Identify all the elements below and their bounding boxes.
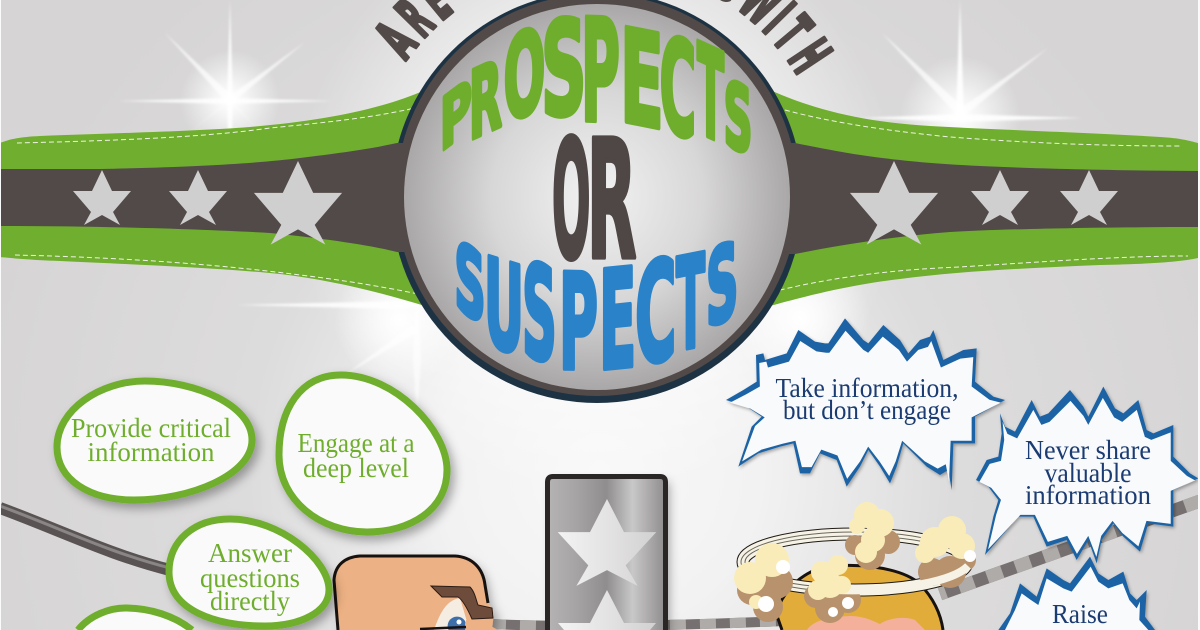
burst: Take information, but don't engage: but don’t engage bbox=[783, 395, 951, 425]
heading: SUSPECTS: E bbox=[599, 241, 636, 402]
heading: PROSPECTS: C bbox=[660, 9, 696, 171]
iris bbox=[448, 617, 466, 630]
sparkle: upper right bbox=[860, 0, 1082, 176]
bubble: Engage at a deep level bbox=[279, 375, 447, 532]
rope: upper left bbox=[0, 506, 170, 570]
sparkle: lower right of medallion bbox=[730, 248, 870, 388]
heading: PROSPECTS: T bbox=[697, 16, 724, 173]
bubble: Engage at a deep level: deep level bbox=[303, 453, 409, 483]
rope: right upper bbox=[940, 501, 1200, 594]
belt: green strap left bbox=[0, 90, 428, 306]
character: prospect head bbox=[334, 556, 498, 630]
bubble: Answer questions directly bbox=[169, 519, 329, 626]
eye white bbox=[434, 598, 468, 630]
mouth shadow bbox=[420, 627, 466, 629]
star left 2 bbox=[169, 170, 227, 225]
hair outline bbox=[776, 565, 943, 630]
burst: Never share valuable information: information bbox=[1025, 480, 1151, 510]
star right 2 bbox=[971, 170, 1029, 225]
rope: lower centre bbox=[490, 621, 785, 626]
burst: Never share valuable information: valuable bbox=[1044, 458, 1132, 488]
arched title: T bbox=[760, 4, 824, 62]
character: suspect head with dizzy halo bbox=[734, 502, 976, 630]
post star 2 bbox=[558, 590, 656, 630]
heading: OR bbox=[552, 107, 637, 297]
eyebrow bbox=[431, 586, 493, 619]
heading: SUSPECTS: S bbox=[522, 236, 557, 394]
burst: Take information, but don't engage bbox=[726, 318, 1005, 490]
star right 3 bbox=[1060, 170, 1118, 225]
popcorn front bbox=[804, 555, 968, 623]
bubble: Provide critical information: Provide critical bbox=[71, 413, 231, 443]
heading: PROSPECTS: P bbox=[440, 62, 472, 169]
arched title bbox=[363, 0, 844, 84]
sparkle: upper left bbox=[118, 0, 332, 200]
heading: PROSPECTS: S bbox=[724, 62, 752, 176]
star right 1 bbox=[850, 161, 938, 245]
star left 1 bbox=[73, 170, 131, 225]
head outline bbox=[334, 556, 488, 630]
arched title: H bbox=[775, 28, 844, 84]
post outline bbox=[548, 476, 666, 630]
halo ring bbox=[741, 532, 969, 592]
bubble: Provide critical information bbox=[57, 381, 252, 500]
bubble: Provide critical information: information bbox=[88, 437, 215, 467]
stitching right bbox=[772, 110, 1188, 292]
pupil highlight bbox=[456, 620, 462, 624]
burst shape bbox=[976, 387, 1198, 563]
burst: Raise: Raise bbox=[1052, 599, 1108, 629]
medallion ring bbox=[391, 0, 803, 403]
belt: green strap right bbox=[770, 90, 1198, 306]
popcorn left bbox=[734, 543, 793, 622]
heading: SUSPECTS: C bbox=[635, 228, 676, 399]
nose bbox=[466, 620, 498, 630]
head fill bbox=[334, 556, 494, 630]
heading: PROSPECTS bbox=[440, 0, 752, 176]
heading: SUSPECTS bbox=[454, 219, 738, 402]
bubble: Answer questions directly: questions bbox=[200, 563, 300, 593]
medallion disc bbox=[404, 4, 790, 390]
hair fill bbox=[776, 565, 943, 630]
star left 3 bbox=[254, 161, 342, 245]
heading: OR: R bbox=[587, 107, 637, 296]
post star 1 bbox=[558, 499, 656, 586]
burst: Never share valuable information: Never share bbox=[1025, 435, 1151, 465]
belt: dark strap left bbox=[0, 143, 420, 252]
heading: PROSPECTS: E bbox=[620, 1, 664, 160]
bubble: Answer questions directly: Answer bbox=[208, 538, 292, 568]
burst shape bbox=[998, 557, 1155, 630]
face bbox=[807, 616, 925, 630]
heading: PROSPECTS: R bbox=[469, 39, 502, 163]
burst shape bbox=[726, 318, 1005, 490]
bubble: Engage at a deep level: Engage at a bbox=[298, 428, 415, 458]
heading: SUSPECTS: S bbox=[706, 219, 738, 354]
heading: SUSPECTS: S bbox=[454, 219, 486, 347]
burst: Take information, but don't engage: Take information, bbox=[776, 373, 958, 403]
stitching left bbox=[15, 108, 428, 296]
popcorn back bbox=[845, 502, 900, 570]
arched title: A bbox=[363, 10, 430, 70]
heading: OR: O bbox=[552, 107, 591, 297]
heading: PROSPECTS: O bbox=[504, 2, 545, 149]
post body bbox=[548, 476, 666, 630]
burst: Never share valuable information bbox=[976, 387, 1198, 563]
belt: dark strap right bbox=[775, 143, 1198, 254]
ring post with stars bbox=[548, 476, 666, 630]
bubble: Answer questions directly: directly bbox=[210, 586, 290, 616]
sparkle: lower left of medallion bbox=[236, 255, 465, 420]
burst: Raise bbox=[998, 557, 1155, 630]
bubble: partial bottom left bbox=[78, 608, 192, 630]
heading: SUSPECTS: P bbox=[559, 246, 598, 400]
heading: SUSPECTS: T bbox=[676, 228, 705, 381]
heading: SUSPECTS: U bbox=[484, 231, 524, 384]
soft light behind medallion bbox=[297, 0, 897, 497]
belt stars: left bbox=[73, 161, 342, 245]
popcorn right bbox=[915, 516, 976, 588]
belt stars: right bbox=[850, 161, 1118, 245]
